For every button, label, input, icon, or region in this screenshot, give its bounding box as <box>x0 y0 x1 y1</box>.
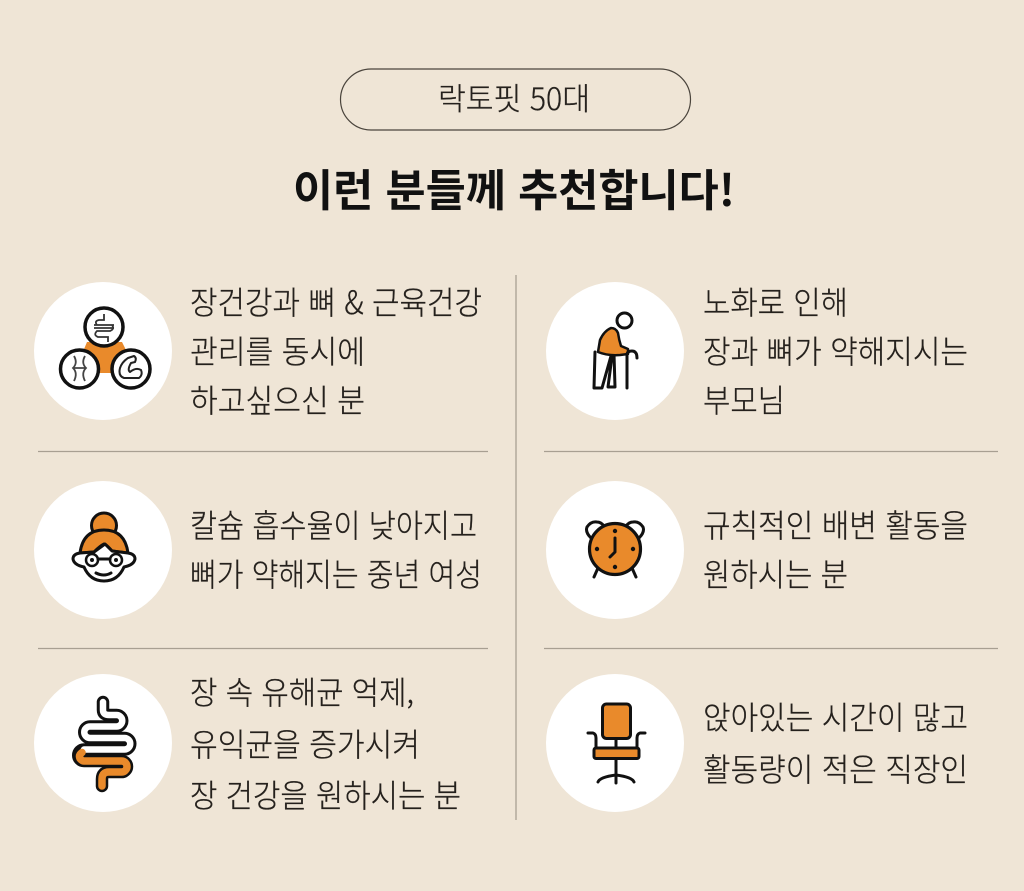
text: middle-aged women: 칼슘 흡수율이 낮아지고 <box>190 501 477 547</box>
text: gut, bone and muscle care: 하고싶으신 분 <box>190 376 365 422</box>
panel: gut health <box>34 668 461 817</box>
text: gut health: 유익균을 증가시켜 <box>190 720 420 766</box>
icon: alarm clock <box>546 481 684 619</box>
panel: parents <box>546 278 968 422</box>
text: regular bowel movement: 원하시는 분 <box>703 550 848 596</box>
text: office workers: 앉아있는 시간이 많고 <box>703 693 968 739</box>
text: parents: 장과 뼈가 약해지시는 <box>703 327 968 373</box>
panel: gut, bone and muscle care <box>34 278 482 422</box>
title: 이런 분들께 추천합니다! <box>293 155 735 219</box>
text: parents: 노화로 인해 <box>703 278 848 324</box>
text: gut health: 장 건강을 원하시는 분 <box>190 771 461 817</box>
icon: grandmother face <box>34 481 172 619</box>
text: parents: 부모님 <box>703 376 785 422</box>
icon: intestine <box>34 674 172 812</box>
text: office workers <box>703 693 968 791</box>
badge: product name pill: 락토핏 50대 <box>438 74 590 119</box>
text: office workers: 활동량이 적은 직장인 <box>703 745 968 791</box>
text: parents <box>703 278 968 422</box>
text: gut, bone and muscle care: 관리를 동시에 <box>190 327 365 373</box>
panel: regular bowel movement <box>546 481 968 619</box>
text: middle-aged women: 뼈가 약해지는 중년 여성 <box>190 550 482 596</box>
badge: product name pill <box>340 69 690 130</box>
text: regular bowel movement: 규칙적인 배변 활동을 <box>703 501 968 547</box>
text: gut, bone and muscle care: 장건강과 뼈 & 근육건강 <box>190 278 482 324</box>
icon: gut, knee and muscle <box>34 282 172 420</box>
text: middle-aged women <box>190 501 482 596</box>
panel: office workers <box>546 674 968 812</box>
icon: office chair <box>546 674 684 812</box>
panel: middle-aged women <box>34 481 482 619</box>
text: gut health <box>190 668 461 817</box>
text: gut, bone and muscle care <box>190 278 482 422</box>
text: regular bowel movement <box>703 501 968 596</box>
icon: elderly person with cane <box>546 282 684 420</box>
text: gut health: 장 속 유해균 억제, <box>190 668 414 714</box>
